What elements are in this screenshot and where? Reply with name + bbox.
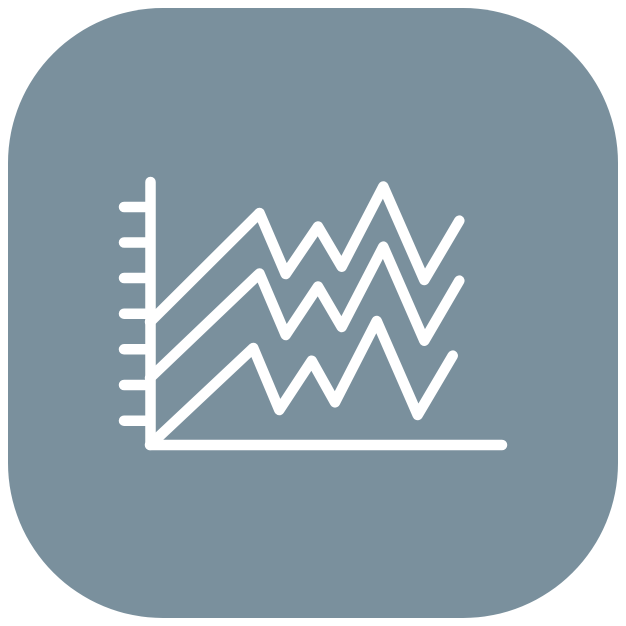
top zigzag line xyxy=(150,186,459,322)
middle zigzag line xyxy=(150,247,459,378)
bottom zigzag line xyxy=(150,321,453,445)
y axis tick marks xyxy=(124,207,150,421)
axes xyxy=(150,182,502,445)
icon: chart xyxy=(124,182,502,445)
